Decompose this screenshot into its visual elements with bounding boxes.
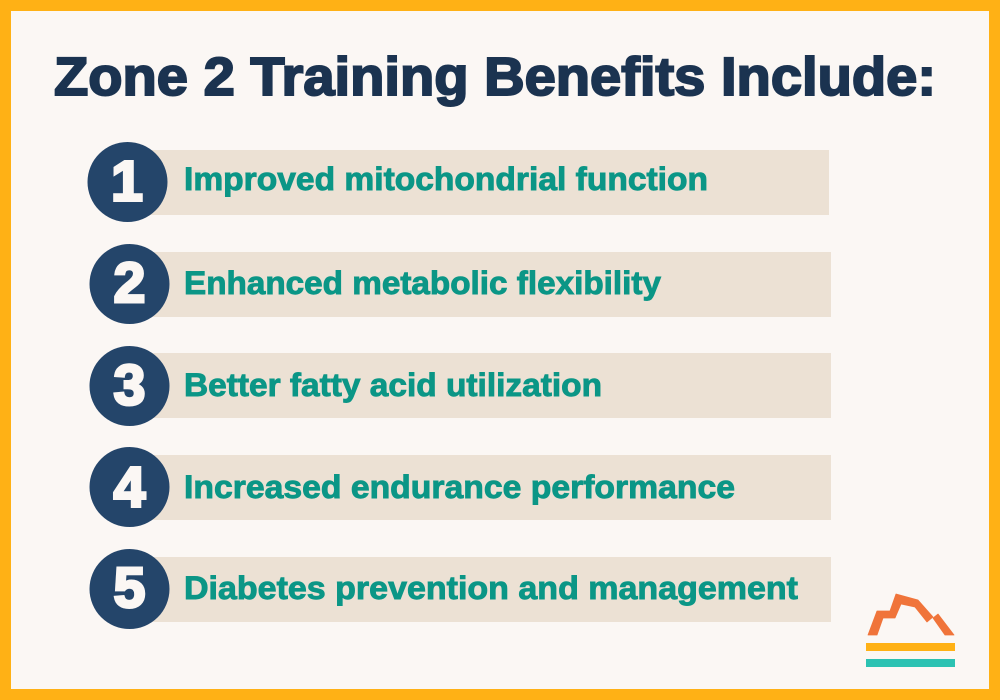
title: Zone 2 Training Benefits Include: <box>54 47 936 107</box>
list item 2 <box>90 244 831 324</box>
list item 3 <box>90 346 831 426</box>
list item 3: 3 <box>114 354 145 418</box>
list item 1 <box>88 142 829 222</box>
list item 4: 4 <box>114 456 146 520</box>
list item 1: Improved mitochondrial function <box>184 161 708 197</box>
list item 1: 1 <box>111 150 143 214</box>
list item 5 <box>90 549 831 629</box>
list item 3: Better fatty acid utilization <box>184 367 602 403</box>
icon: mountain logo <box>866 594 955 667</box>
list item 5: Diabetes prevention and management <box>184 570 798 606</box>
list item 5: 5 <box>114 556 145 620</box>
list item 2: 2 <box>114 251 145 315</box>
list item 2: Enhanced metabolic flexibility <box>184 265 661 301</box>
list item 4: Increased endurance performance <box>184 469 735 505</box>
list item 4 <box>90 447 831 527</box>
